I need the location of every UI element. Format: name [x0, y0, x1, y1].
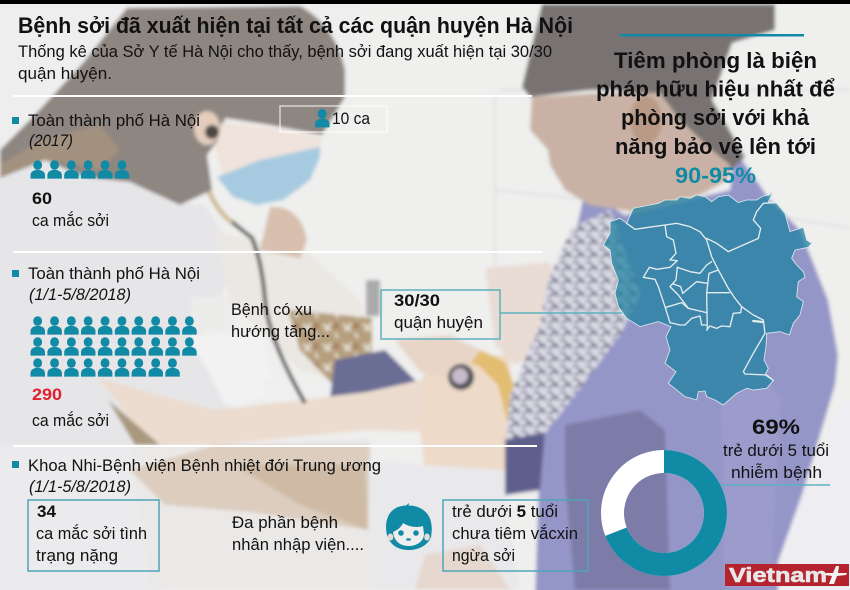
- white coat: [0, 160, 235, 590]
- stat: 69% children under 5 infected: [720, 416, 830, 485]
- blue coat of grandmother: [535, 150, 838, 590]
- legend: one icon equals 10 cases: 10 ca: [332, 109, 370, 128]
- note: most patients admitted: Đa phần bệnh: [232, 513, 338, 532]
- note: most patients admitted: [232, 513, 364, 554]
- section: Hanoi 2018: ca mắc sởi: [32, 411, 109, 430]
- section: Hanoi 2018: 290: [32, 385, 62, 404]
- cushion right: [778, 400, 850, 590]
- heading: vaccination: Tiêm phòng là biện: [614, 48, 817, 73]
- title: Bệnh sởi đã xuất hiện tại tất cả các quận huyện Hà Nội: [18, 13, 573, 38]
- nurse face and mask: [215, 122, 322, 205]
- forearm and sleeve: [215, 232, 385, 395]
- callout: 34 severe cases: 34: [37, 502, 57, 521]
- intro text: quận huyện.: [18, 64, 112, 83]
- intro text: Thống kê của Sở Y tế Hà Nội cho thấy, bệnh sởi đang xuất hiện tại 30/30: [18, 42, 552, 61]
- callout: under 5 unvaccinated: ngừa sởi: [452, 546, 515, 565]
- section: Pediatric department: [12, 456, 381, 496]
- heading: vaccination: phòng sởi với khả: [621, 105, 810, 130]
- bed and mat: [130, 438, 385, 590]
- section: Hanoi 2017: [12, 111, 200, 230]
- stat: 69% children under 5 infected: 69%: [752, 416, 800, 439]
- baby body, scarf and face: [420, 355, 515, 470]
- intro text: [18, 42, 552, 83]
- note: rising trend: hướng tăng...: [231, 322, 330, 341]
- section: Hanoi 2018: [12, 264, 200, 430]
- divider lines: [13, 96, 543, 446]
- stethoscope tube: [202, 142, 305, 403]
- icon grid: 290 cases: [30, 316, 197, 377]
- map of Hanoi districts: [603, 190, 812, 405]
- callout: 30/30 districts: quận huyện: [394, 313, 483, 332]
- logo: Vietnam+: [725, 564, 849, 587]
- callout: 30/30 districts: 30/30: [394, 291, 440, 310]
- note: most patients admitted: nhân nhập viện....: [232, 535, 364, 554]
- heading: vaccination: năng bảo vệ lên tới: [615, 134, 816, 159]
- legend: one icon equals 10 cases: [280, 106, 387, 132]
- heading: vaccination: pháp hữu hiệu nhất để: [596, 76, 835, 102]
- logo: Vietnam+: Vietnam: [729, 565, 827, 587]
- section: Pediatric department: Khoa Nhi-Bệnh viện Bệnh nhiệt đới Trung ương: [28, 456, 381, 475]
- top black bar: [0, 0, 850, 4]
- nurse hair: [0, 6, 345, 205]
- section: Hanoi 2017: 60: [32, 189, 52, 208]
- note: rising trend: [231, 300, 330, 341]
- section: Pediatric department: (1/1-5/8/2018): [29, 477, 131, 496]
- accent line above heading: [620, 34, 804, 36]
- callout: under 5 unvaccinated: [443, 500, 588, 571]
- section: Hanoi 2017: Toàn thành phố Hà Nội: [28, 111, 200, 130]
- callout: under 5 unvaccinated: trẻ dưới 5 tuổi: [452, 502, 558, 521]
- callout: under 5 unvaccinated: chưa tiêm vắcxin: [452, 524, 578, 543]
- callout: 34 severe cases: ca mắc sởi tình: [36, 524, 147, 543]
- callout: 30/30 districts: [381, 290, 622, 339]
- patterned scarf: [505, 210, 640, 445]
- wall tiles: [495, 90, 850, 295]
- heading: vaccination: [596, 48, 835, 188]
- stat: 69% children under 5 infected: nhiễm bệnh: [731, 463, 822, 482]
- stat: 69% children under 5 infected: trẻ dưới 5 tuổi: [723, 441, 829, 460]
- donut chart: 69%: [612, 462, 716, 564]
- icon row: 60 cases: [30, 160, 129, 179]
- grandmother hair and face: [522, 4, 775, 178]
- note: rising trend: Bệnh có xu: [231, 300, 312, 319]
- heading: vaccination: 90-95%: [675, 163, 756, 188]
- callout: 34 severe cases: trạng nặng: [36, 546, 118, 565]
- section: Hanoi 2017: (2017): [29, 131, 73, 150]
- section: Hanoi 2018: Toàn thành phố Hà Nội: [28, 264, 200, 283]
- callout: 34 severe cases: [28, 500, 159, 571]
- section: Hanoi 2017: ca mắc sởi: [32, 211, 109, 230]
- icon: child face: [386, 503, 432, 550]
- section: Hanoi 2018: (1/1-5/8/2018): [29, 285, 131, 304]
- lower baby clothes and hand: [368, 460, 520, 590]
